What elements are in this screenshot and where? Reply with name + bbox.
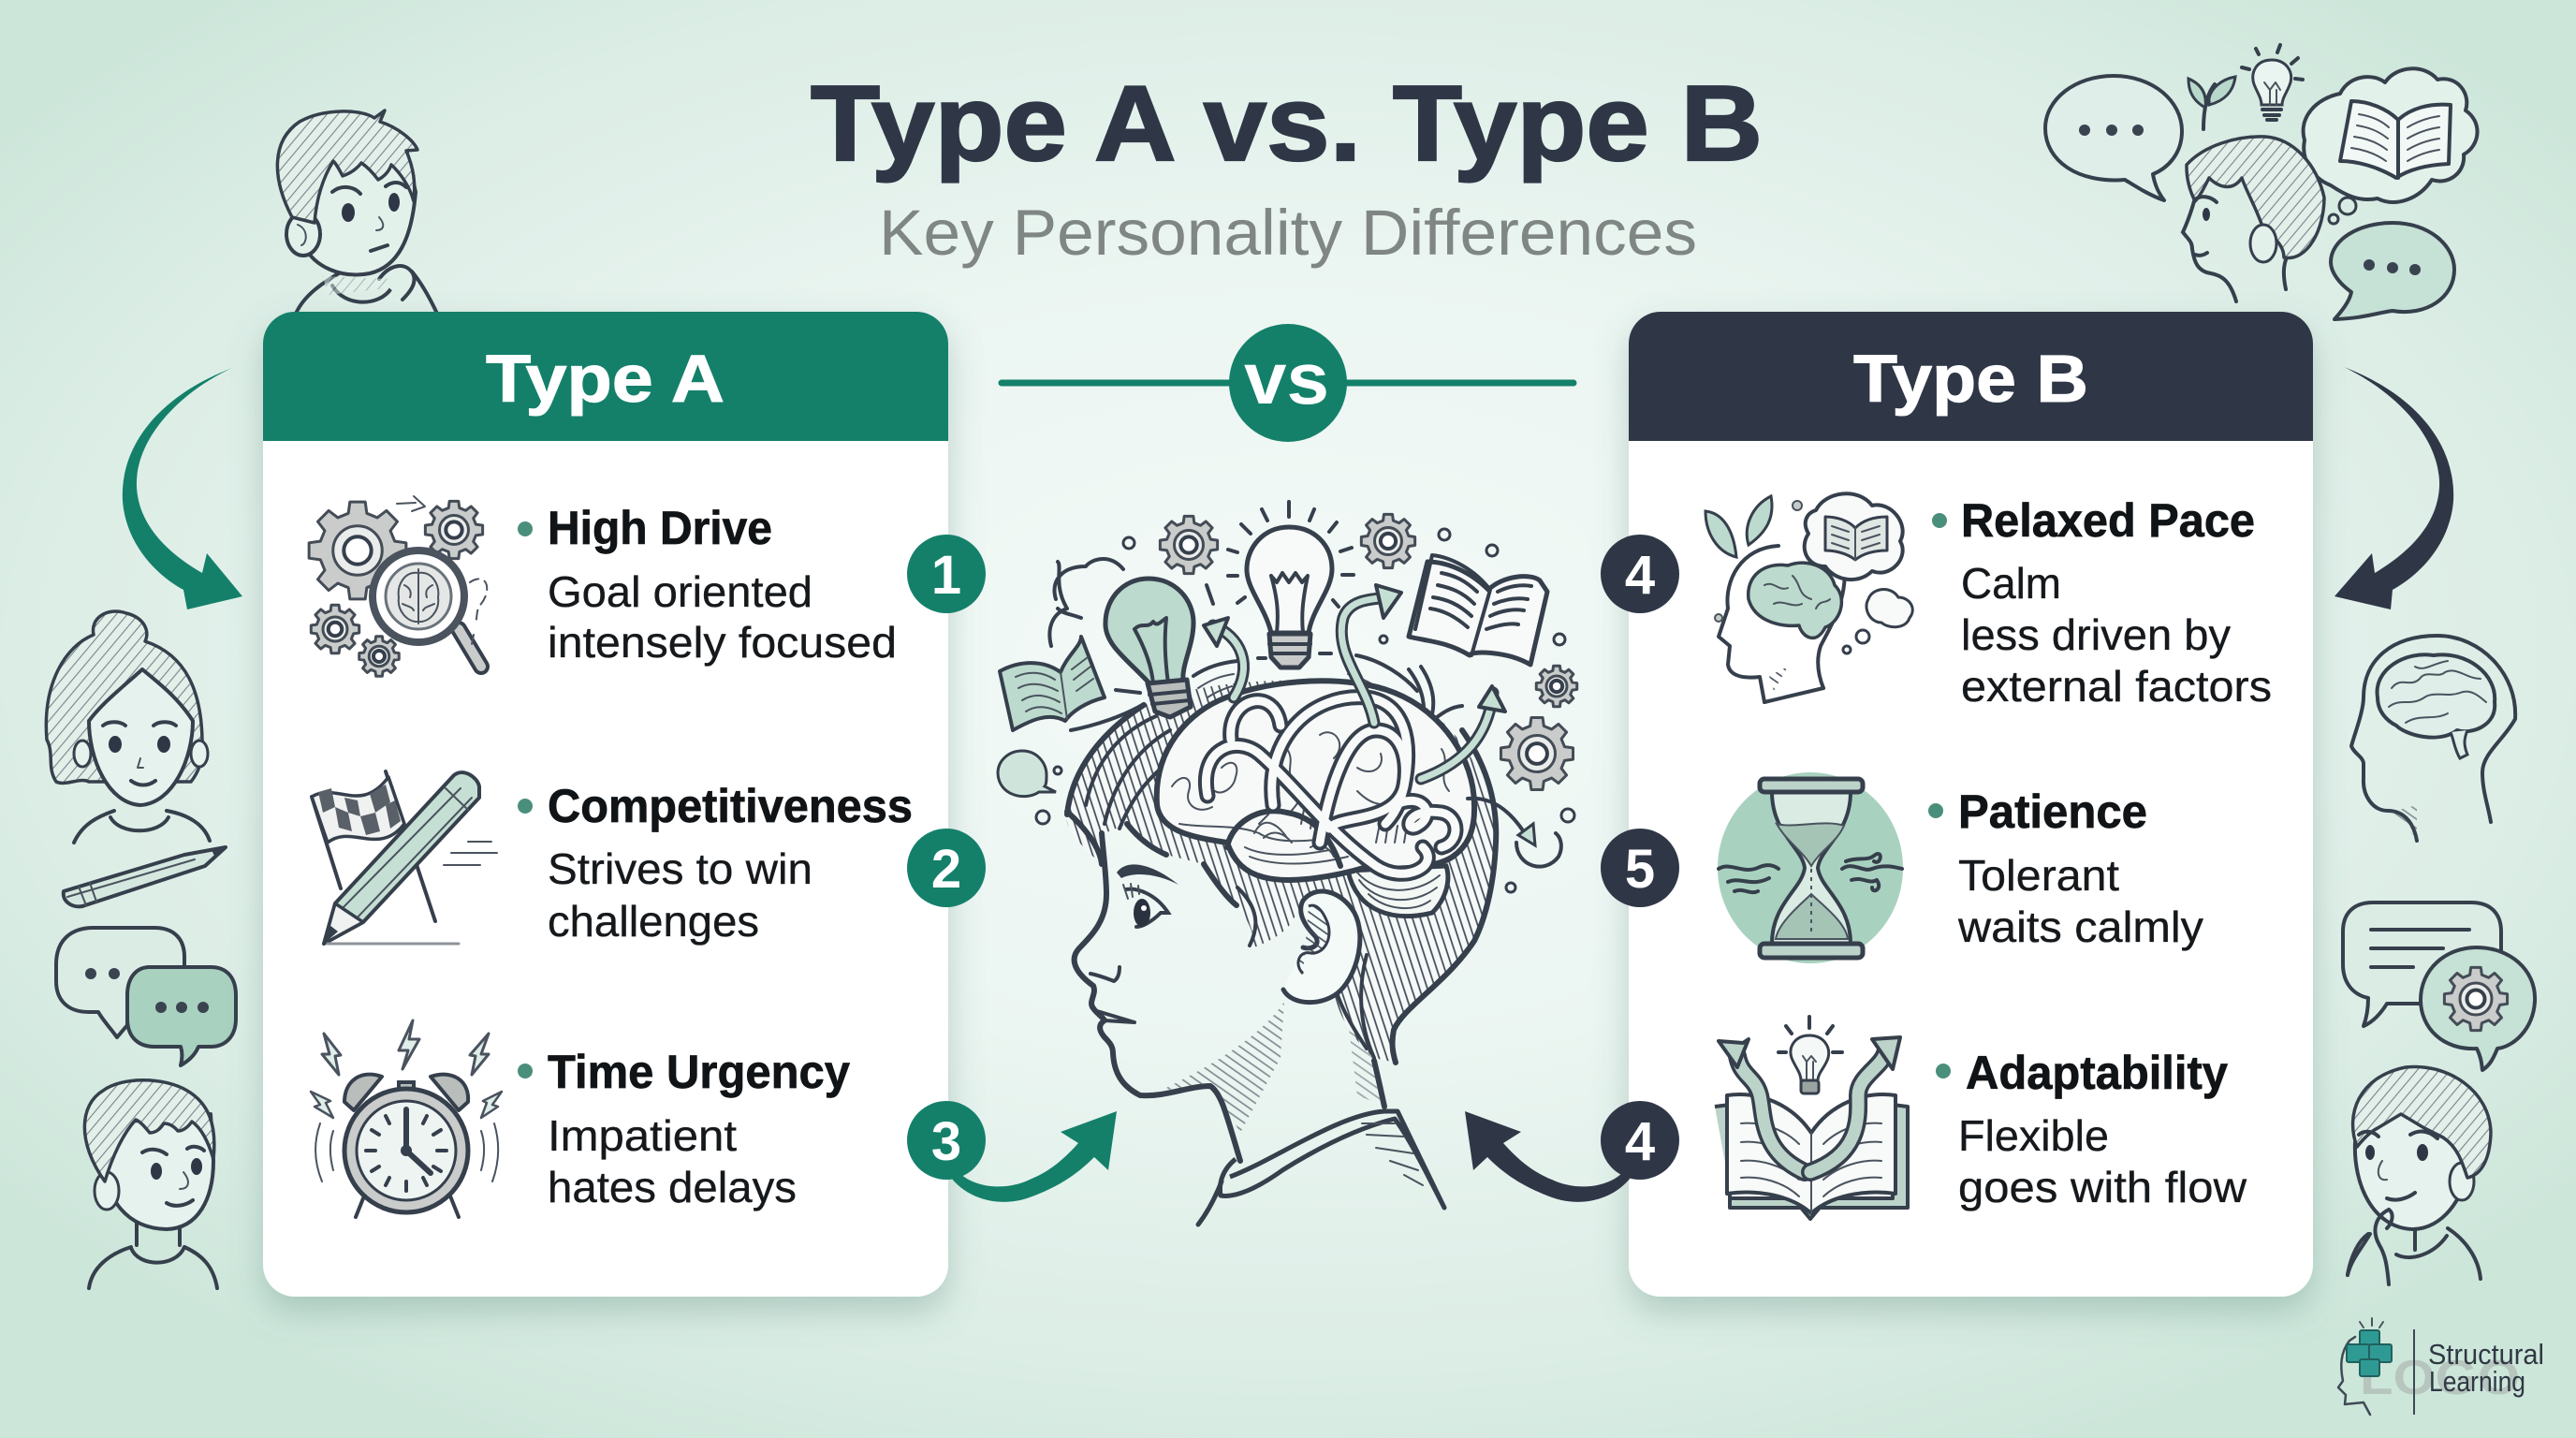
small bulb bbox=[2242, 45, 2303, 120]
text: strives to win: challenges bbox=[548, 897, 759, 946]
eye and brow bbox=[1117, 864, 1178, 927]
subtitle: Key Personality Differences bbox=[879, 197, 1697, 269]
title: Type A vs. Type B bbox=[811, 65, 1763, 183]
logo watermark: LOGO bbox=[2360, 1351, 2520, 1405]
icon: calm head with brain and cloud bbox=[1705, 493, 1912, 702]
illustration: speech bubbles left bbox=[56, 928, 236, 1065]
heading: Time Urgency: Time Urgency bbox=[548, 1046, 850, 1098]
green bulb bbox=[1105, 579, 1193, 717]
vs badge: vs bbox=[1244, 337, 1329, 419]
ribbons inside brain bbox=[1206, 697, 1456, 873]
nose and lips bbox=[1090, 967, 1134, 1022]
panel header: Type A bbox=[263, 312, 948, 441]
text: calm: Calm bbox=[1961, 559, 2061, 608]
arrows out of brain bbox=[1204, 585, 1561, 867]
bullet bbox=[518, 799, 533, 814]
doodle cloud, bubble and dots bbox=[998, 529, 1574, 892]
arrow: 4 to head bbox=[1465, 1111, 1631, 1202]
heading: Patience: Patience bbox=[1958, 785, 2147, 838]
panel title: Type B: Type B bbox=[1853, 343, 2088, 417]
text: goal oriented: intensely focused bbox=[548, 618, 897, 667]
illustration: central child head with busy brain bbox=[998, 502, 1577, 1225]
illustration: thinking boy top left bbox=[277, 110, 437, 314]
text: strives to win: Strives to win bbox=[548, 844, 812, 893]
text: impatient: hates delays bbox=[548, 1163, 797, 1211]
text: impatient bbox=[548, 1111, 797, 1211]
neck hatching bbox=[1161, 1002, 1284, 1133]
text: calm: external factors bbox=[1961, 662, 2272, 711]
text: tolerant: waits calmly bbox=[1957, 902, 2203, 951]
ear bbox=[1283, 891, 1360, 1003]
hair bbox=[1066, 681, 1496, 1063]
brain folds bbox=[1172, 707, 1449, 863]
text: goal oriented: Goal oriented bbox=[548, 567, 812, 616]
swirl behind ear bbox=[1348, 866, 1448, 917]
left book bbox=[1000, 637, 1105, 730]
panel header: Type B bbox=[1629, 312, 2313, 441]
icon: alarm clock bbox=[311, 1020, 502, 1217]
icon: hourglass bbox=[1718, 772, 1903, 963]
lower brain lobe bbox=[1227, 811, 1340, 866]
face profile bbox=[1075, 833, 1240, 1161]
number badge 2 bbox=[907, 829, 986, 907]
gears around head bbox=[1160, 514, 1577, 790]
logo: Structural Learning bbox=[2338, 1318, 2544, 1415]
text: flexible bbox=[1958, 1111, 2247, 1211]
text: tolerant: Tolerant bbox=[1958, 851, 2119, 900]
speech bubble top bbox=[2045, 76, 2182, 200]
number badge 5 bbox=[1601, 829, 1679, 907]
number badge 1: 1 bbox=[931, 545, 961, 606]
sweater collar bbox=[1220, 1111, 1444, 1208]
right book bbox=[1409, 555, 1547, 665]
arrow: type B curved to list bbox=[2334, 367, 2453, 609]
heading: Adaptability: Adaptability bbox=[1966, 1047, 2228, 1099]
number badge 3: 3 bbox=[931, 1111, 961, 1172]
number badge 4 top: 4 bbox=[1625, 545, 1655, 606]
icon: open book with arrows and bulb bbox=[1715, 1017, 1908, 1219]
logo wordmark: Learning bbox=[2429, 1365, 2525, 1398]
number badge 1 bbox=[907, 535, 986, 613]
arrow: 3 to head bbox=[951, 1111, 1117, 1202]
bullet bbox=[518, 1064, 533, 1078]
white bulb bbox=[1207, 502, 1354, 668]
text: flexible: Flexible bbox=[1958, 1111, 2109, 1160]
hair top strands bbox=[1071, 653, 1462, 730]
bullet bbox=[1928, 803, 1943, 818]
brain bbox=[1157, 681, 1474, 880]
text: tolerant bbox=[1957, 851, 2203, 951]
thought cloud with book bbox=[2304, 68, 2478, 202]
line behind vs badge bbox=[1002, 380, 1573, 386]
text: calm bbox=[1961, 559, 2272, 711]
logo cross bbox=[2347, 1330, 2392, 1376]
number badge 4 top bbox=[1601, 535, 1679, 613]
logo wordmark: Structural bbox=[2428, 1338, 2544, 1371]
logo wordmark bbox=[2428, 1338, 2544, 1398]
text: impatient: Impatient bbox=[548, 1111, 737, 1160]
text: flexible: goes with flow bbox=[1958, 1163, 2247, 1211]
heading: High Drive: High Drive bbox=[548, 502, 772, 554]
number badge 2: 2 bbox=[931, 839, 961, 900]
vs badge bbox=[1229, 324, 1347, 442]
text: calm: less driven by bbox=[1961, 610, 2231, 659]
leaves bbox=[2188, 77, 2235, 129]
illustration: boy bottom left bbox=[84, 1080, 217, 1288]
heading: Relaxed Pace: Relaxed Pace bbox=[1961, 494, 2255, 547]
illustration: thinking boy bottom right bbox=[2348, 1066, 2491, 1284]
icon: checkered flag and pencil bbox=[312, 771, 497, 944]
number badge 4 bottom bbox=[1601, 1101, 1679, 1180]
logo head outline bbox=[2338, 1337, 2370, 1415]
bullet bbox=[1936, 1064, 1951, 1078]
bullet bbox=[1932, 513, 1947, 528]
speech bubble lower bbox=[2331, 223, 2454, 319]
panel: Type A bbox=[263, 312, 948, 1297]
arrow: type A curved to list bbox=[123, 368, 242, 609]
text: goal oriented bbox=[548, 567, 897, 667]
illustration: pencil left bbox=[64, 847, 226, 906]
illustration: speech bubbles with gear right bbox=[2343, 902, 2535, 1070]
illustration: top right thoughts and boy bbox=[2045, 45, 2478, 319]
text: strives to win bbox=[548, 844, 812, 946]
illustration: head with brain right bbox=[2351, 636, 2515, 841]
panel: Type B bbox=[1629, 312, 2313, 1297]
bullet bbox=[518, 521, 533, 536]
number badge 5: 5 bbox=[1625, 839, 1655, 900]
illustration: girl with ponytail bbox=[46, 611, 210, 843]
panel title: Type A: Type A bbox=[486, 343, 724, 417]
icon: gears and magnifier bbox=[309, 496, 487, 676]
number badge 4 bottom: 4 bbox=[1625, 1111, 1655, 1172]
heading: Competitiveness: Competitiveness bbox=[548, 780, 913, 832]
number badge 3 bbox=[907, 1101, 986, 1180]
boy profile bbox=[2183, 178, 2289, 301]
